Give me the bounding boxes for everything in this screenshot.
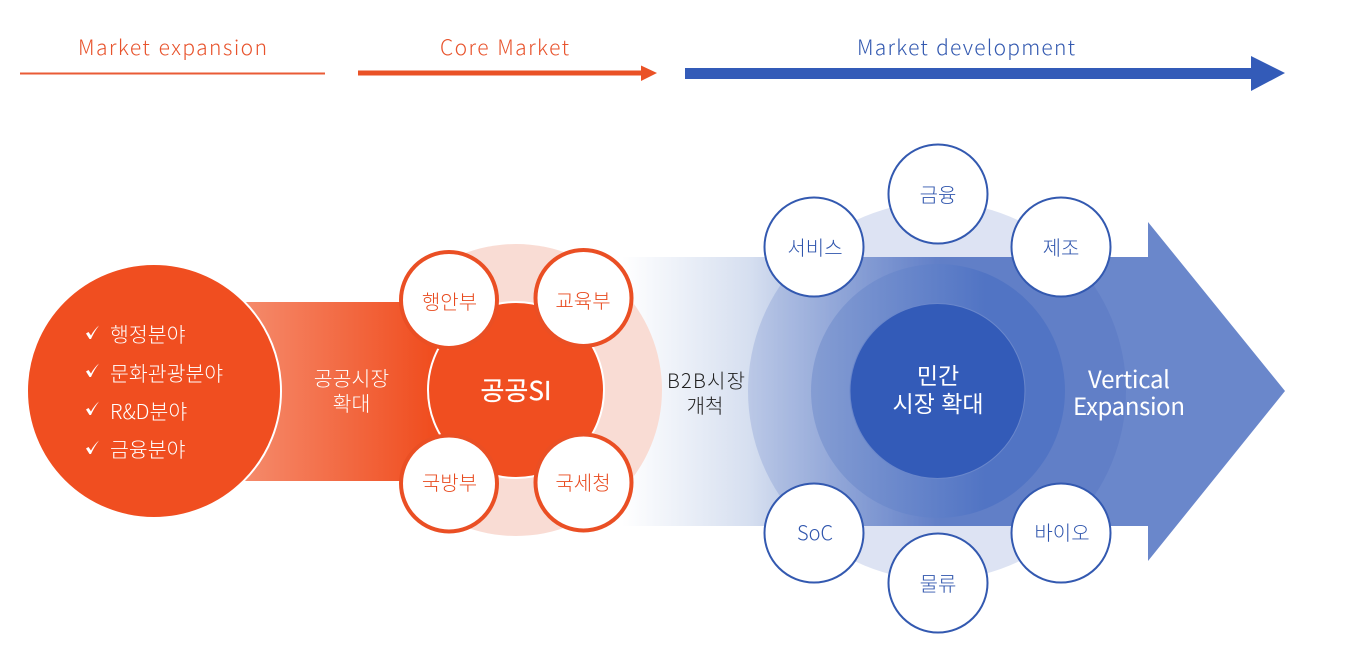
- label: public market expansion: 공공시장: [314, 362, 389, 392]
- checklist: 문화관광분야: [110, 357, 223, 387]
- node: 교육부: 교육부: [555, 285, 611, 314]
- header: core market arrow: [358, 32, 657, 81]
- public SI core circle: 공공SI: [481, 371, 551, 408]
- node: SoC: SoC: [797, 517, 833, 546]
- node: 제조: 제조: [1043, 232, 1079, 261]
- label: public market expansion: 확대: [333, 387, 370, 417]
- node: 행안부: [401, 252, 497, 348]
- label: vertical expansion: Vertical: [1088, 360, 1170, 395]
- header: market development arrow: [685, 32, 1285, 91]
- node: 바이오: 바이오: [1034, 517, 1090, 546]
- label: B2B market: 개척: [687, 390, 723, 419]
- label: vertical expansion: [1073, 360, 1185, 422]
- label: B2B market: [667, 365, 745, 419]
- node: 국방부: 국방부: [422, 467, 477, 496]
- node: 물류: 물류: [920, 568, 956, 597]
- node: 바이오: [1012, 484, 1110, 582]
- node: 금융: 금융: [920, 179, 956, 208]
- node: 국세청: 국세청: [555, 467, 611, 496]
- checklist: [86, 318, 223, 463]
- node: 물류: [888, 534, 988, 632]
- private market core circle: 시장 확대: [892, 385, 984, 419]
- header: core market arrow: Core Market: [440, 32, 570, 62]
- blue outer halo circle: [748, 202, 1126, 580]
- private market core circle: [850, 304, 1025, 478]
- public SI core circle: [428, 302, 604, 478]
- private market core circle: 민간: [917, 357, 959, 391]
- label: vertical expansion: Expansion: [1073, 387, 1185, 422]
- label: B2B market: B2B시장: [667, 365, 745, 394]
- node: SoC: [764, 484, 864, 582]
- orange expansion band: [240, 302, 480, 481]
- blue expansion arrow: [622, 222, 1285, 561]
- node: 국방부: [401, 436, 497, 532]
- header: market expansion: Market expansion: [78, 32, 267, 62]
- node: 서비스: [764, 198, 864, 296]
- node: 제조: [1012, 198, 1110, 296]
- node: 국세청: [536, 434, 632, 530]
- blue middle circle: [811, 264, 1065, 518]
- node: 서비스: 서비스: [787, 232, 843, 261]
- checklist: R&D분야: [110, 395, 187, 425]
- header: market development arrow: Market development: [857, 32, 1076, 62]
- node: 금융: [888, 144, 988, 244]
- orange pale halo circle: [370, 244, 662, 536]
- checklist: 금융분야: [110, 433, 186, 463]
- label: public market expansion: [314, 362, 389, 417]
- checklist: 행정분야: [110, 318, 186, 348]
- market expansion circle: [27, 264, 281, 518]
- node: 행안부: 행안부: [422, 286, 477, 315]
- node: 교육부: [536, 250, 632, 346]
